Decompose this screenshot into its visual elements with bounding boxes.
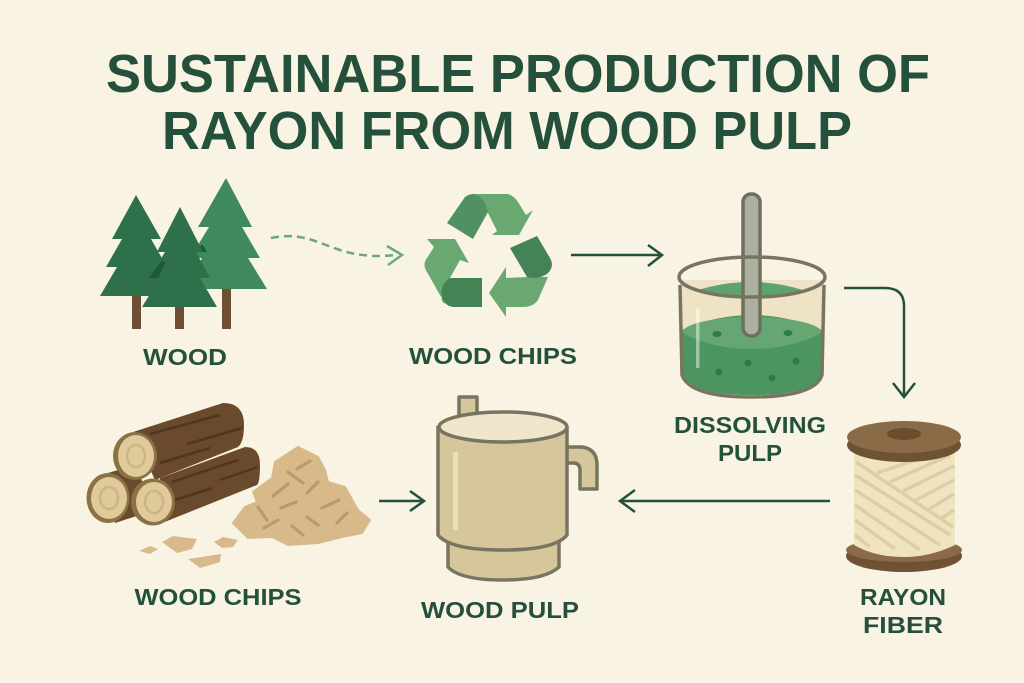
icon: wood pulp vessel [438,397,597,580]
label: dissolving pulp: PULP [718,440,782,466]
icon: trees [100,178,267,329]
label: dissolving pulp: DISSOLVING [674,412,826,438]
label: dissolving pulp [674,412,826,466]
arrow: recycle to beaker [571,245,662,266]
arrow: chips to cup [379,491,424,511]
arrow: dashed trees to recycle [271,236,402,265]
label: wood: WOOD [143,344,227,370]
icon: recycle symbol [424,194,552,317]
label: rayon fiber: RAYON [860,584,946,610]
label: wood chips top: WOOD CHIPS [409,343,577,369]
title: RAYON FROM WOOD PULP [162,102,852,161]
title [106,45,930,161]
icon: rayon fiber spool [846,421,962,572]
icon: logs and chips [86,403,370,568]
arrow: beaker to spool [844,288,915,397]
label: rayon fiber: FIBER [863,612,943,638]
title: SUSTAINABLE PRODUCTION OF [106,45,930,104]
label: wood pulp: WOOD PULP [421,597,579,623]
label: rayon fiber [860,584,946,638]
arrow: spool to cup [620,490,830,512]
label: wood chips bottom: WOOD CHIPS [134,584,302,610]
icon: beaker with stirring rod [679,194,825,397]
